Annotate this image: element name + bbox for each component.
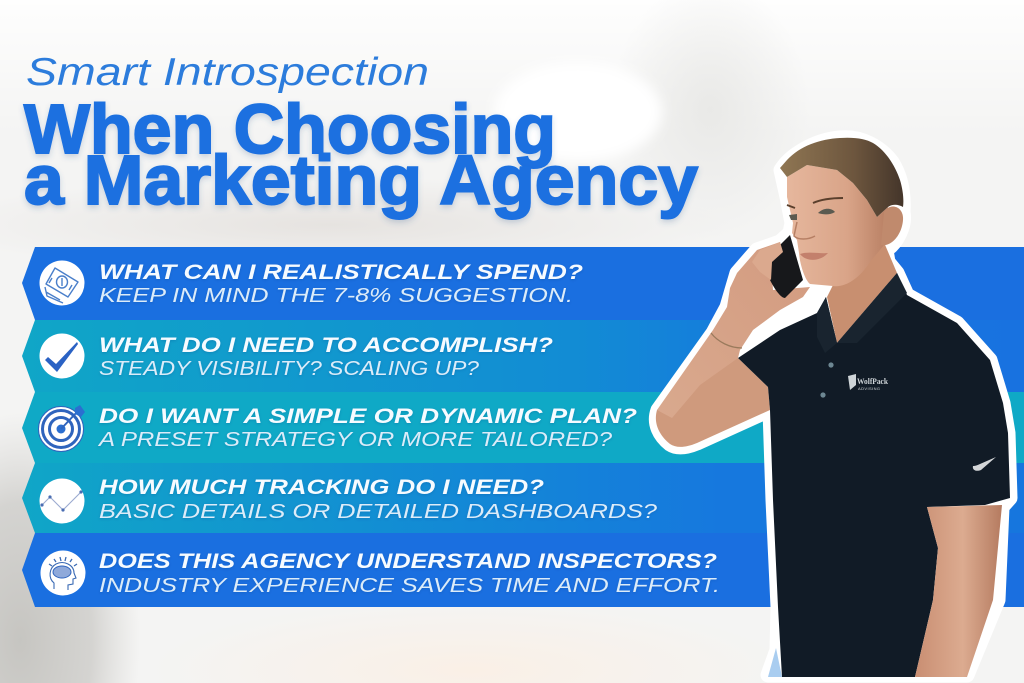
text: question 4 <box>99 476 658 523</box>
subtitle line: Smart Introspection <box>26 51 429 94</box>
title <box>24 51 698 219</box>
hair <box>780 138 903 217</box>
logo: WolfPack Advising: WolfPack <box>857 376 888 386</box>
text: question 3: DO I WANT A SIMPLE OR DYNAMIC PLAN? <box>99 405 637 428</box>
text: question 3: A PRESET STRATEGY OR MORE TAILORED? <box>97 428 613 451</box>
collar <box>817 273 907 353</box>
person on phone <box>656 138 1010 677</box>
title line 1: When Choosing <box>24 90 556 168</box>
text: question 2: STEADY VISIBILITY? SCALING UP? <box>99 357 480 380</box>
band 4 <box>22 463 1024 533</box>
logo: WolfPack Advising: ADVISING <box>858 386 880 391</box>
icon: brain <box>40 550 86 596</box>
title line 2: a Marketing Agency <box>24 141 698 219</box>
panel: question bands <box>22 247 1024 607</box>
text: question 5: DOES THIS AGENCY UNDERSTAND INSPECTORS? <box>99 550 717 573</box>
nose <box>794 222 815 239</box>
mouth <box>800 253 828 260</box>
text: question 1: KEEP IN MIND THE 7-8% SUGGESTION. <box>99 284 573 307</box>
icon: money <box>40 260 84 306</box>
jeans sliver <box>768 648 782 677</box>
swoosh logo <box>973 457 996 471</box>
logo: WolfPack Advising <box>848 374 888 391</box>
black polo shirt <box>738 273 1010 677</box>
text: question 5 <box>99 550 720 597</box>
neck <box>827 240 897 343</box>
icon: target <box>38 405 85 452</box>
fingers <box>752 242 783 280</box>
band 2 <box>22 320 1024 392</box>
shirt buttons <box>820 362 834 398</box>
lower arm <box>915 505 1002 677</box>
text: question 1 <box>99 261 583 307</box>
text: question 1: WHAT CAN I REALISTICALLY SPEND? <box>99 261 583 284</box>
text: question 3 <box>97 405 637 451</box>
phone <box>770 235 803 298</box>
white sticker outline <box>656 138 1010 675</box>
text: question 4: BASIC DETAILS OR DETAILED DASHBOARDS? <box>99 500 658 523</box>
band 5 <box>22 533 1024 607</box>
eyes and brows <box>787 198 843 208</box>
band 1 <box>22 247 1024 320</box>
ear <box>881 206 903 245</box>
forearm and hand <box>657 242 810 418</box>
bracelet <box>711 333 742 348</box>
icon: line chart <box>40 478 84 524</box>
text: question 5: INDUSTRY EXPERIENCE SAVES TIME AND EFFORT. <box>99 574 720 597</box>
text: question 2: WHAT DO I NEED TO ACCOMPLISH? <box>99 334 553 357</box>
text: question 4: HOW MUCH TRACKING DO I NEED? <box>99 476 544 499</box>
band 3 <box>22 392 1024 463</box>
face <box>787 165 888 286</box>
upper arm <box>656 358 770 447</box>
text: question 2 <box>99 334 553 380</box>
icon: check mark <box>40 334 84 378</box>
